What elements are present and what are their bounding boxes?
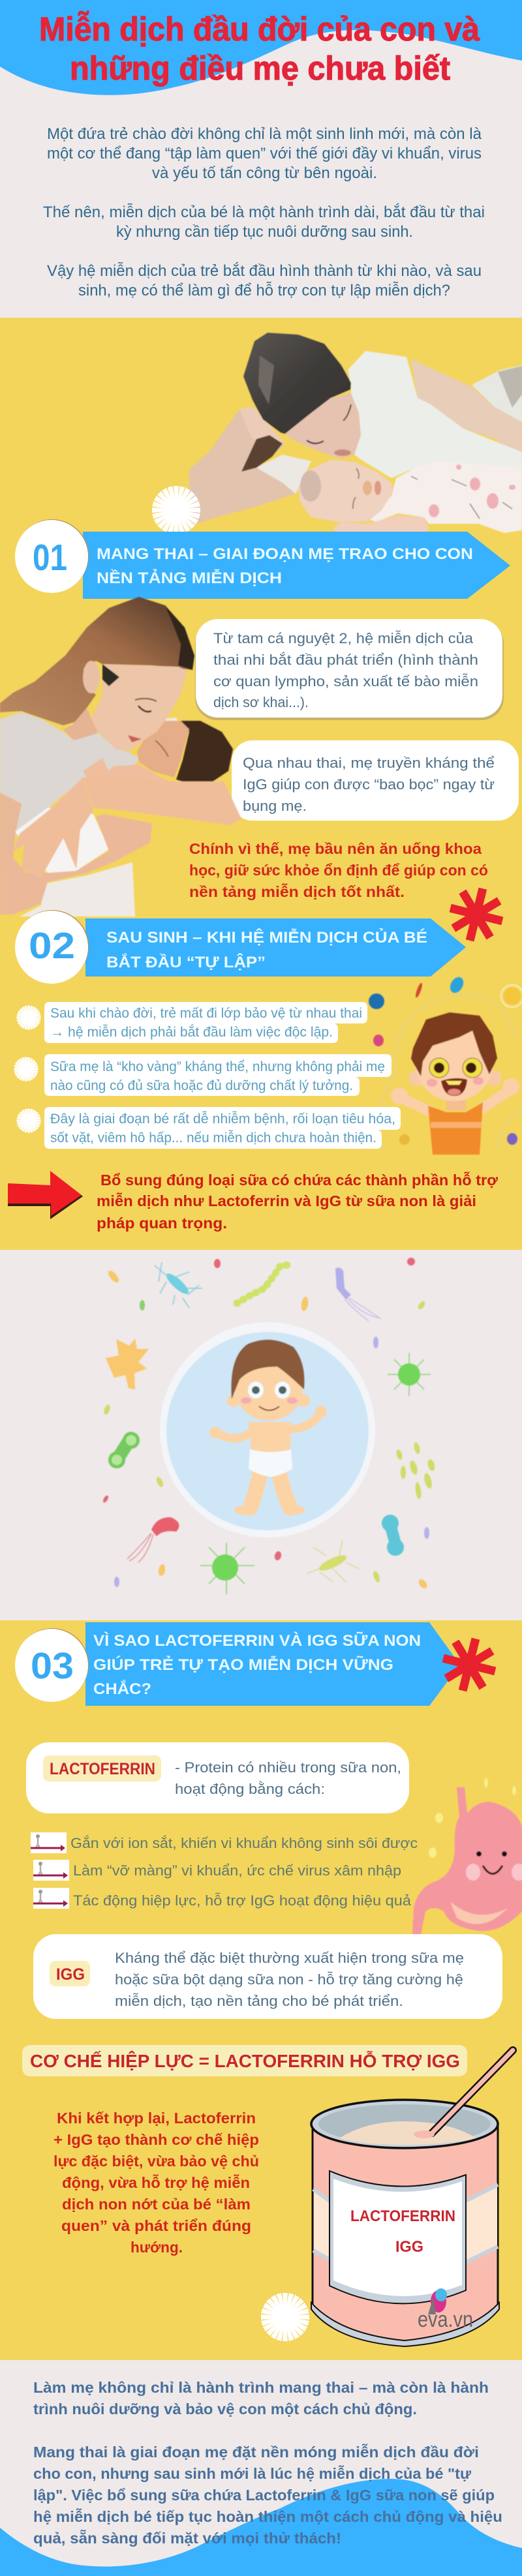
illustration: baby in immune bubble with germs <box>102 1258 436 1594</box>
conclusion text: quả, sẵn sàng đối mặt với mọi thử thách! <box>33 2529 341 2547</box>
germs <box>369 993 384 1009</box>
arms <box>399 1091 509 1112</box>
number: 01 <box>33 537 67 579</box>
number circle <box>16 519 89 592</box>
intro text: sinh, mẹ có thể làm gì để hỗ trợ con tự lập miễn dịch? <box>78 282 450 299</box>
purple bacterium <box>335 1267 381 1321</box>
red text: synergy: lực đặc biệt, vừa bảo vệ chủ <box>54 2153 259 2170</box>
red advice text 1: học, giữ sức khỏe ổn định để giúp con có <box>189 862 488 879</box>
smile <box>259 1406 279 1410</box>
green virus bottom <box>200 1543 254 1594</box>
speech box 1: cơ quan lympho, sản xuất tế bào miễn <box>213 673 478 689</box>
watermark: eva.vn <box>418 2288 473 2332</box>
panel: header <box>0 0 522 299</box>
eyes <box>429 1058 449 1078</box>
arm <box>83 776 241 825</box>
illustration: happy stomach <box>412 1778 522 1935</box>
lactoferrin label <box>43 1755 161 1781</box>
item 3: Tác động hiệp lực, hỗ trợ IgG hoạt động hiệu quả <box>73 1892 412 1909</box>
feet <box>234 1506 253 1515</box>
cheeks <box>241 1397 251 1404</box>
number circle <box>16 910 89 983</box>
baby face <box>137 721 189 778</box>
upper arm <box>0 793 22 869</box>
lower arm and baby legs <box>0 814 152 915</box>
panel: IgG: miễn dịch, tạo nền tảng cho bé phát triển. <box>115 1993 403 2009</box>
shirt <box>428 1102 483 1155</box>
bullet 3 <box>17 1107 401 1149</box>
bullet 2: nào cũng có đủ sữa hoặc đủ dưỡng chất lý tưởng. <box>50 1078 353 1093</box>
shirt <box>348 351 522 478</box>
speech box 2: bụng mẹ. <box>243 798 307 814</box>
panel: IgG: IGG <box>56 1965 85 1984</box>
baby arm <box>333 515 429 541</box>
face <box>285 393 361 459</box>
red text: synergy: dịch non nớt của bé “làm <box>62 2196 251 2213</box>
bottom blue wave <box>0 2479 522 2576</box>
hands <box>209 1427 221 1438</box>
bullet 3: Đây là giai đoạn bé rất dễ nhiễm bệnh, rối loạn tiêu hóa, <box>50 1112 395 1127</box>
face <box>415 1025 493 1101</box>
hand <box>13 778 93 877</box>
red advice text 1: Chính vì thế, mẹ bầu nên ăn uống khoa <box>189 840 482 857</box>
bullet 3: sốt vặt, viêm hô hấp... nếu miễn dịch chưa hoàn thiện. <box>50 1130 376 1145</box>
intro text: Vậy hệ miễn dịch của trẻ bắt đầu hình thành từ khi nào, và sau <box>47 262 482 280</box>
banner 03 <box>15 1622 460 1706</box>
protective bubble outline <box>378 995 522 1151</box>
speech box 2 <box>232 740 519 821</box>
baby legs <box>250 1474 290 1508</box>
cream band <box>314 2187 497 2262</box>
panel: lactoferrin: LACTOFERRIN <box>50 1760 155 1778</box>
speech box 2: IgG giúp con được “bao bọc” ngay từ <box>243 776 495 793</box>
stomach highlight <box>450 1902 508 1924</box>
conclusion text <box>33 2379 502 2547</box>
intro text <box>43 125 485 299</box>
photo: asian mother holding newborn <box>0 597 241 917</box>
yellow bacterium <box>307 1541 359 1582</box>
conclusion text: cho con, nhưng sau sinh mới là lúc hệ miễn dịch của bé "tự <box>33 2464 471 2482</box>
banner 03: GIÚP TRẺ TỰ TẠO MIỄN DỊCH VỮNG <box>93 1655 393 1674</box>
box text: Từ tam cá nguyệt 2, hệ miễn dịch của <box>213 630 474 646</box>
bubble <box>160 1322 375 1538</box>
intro text: Thế nên, miễn dịch của bé là một hành trình dài, bắt đầu từ thai <box>43 204 485 221</box>
hair <box>231 1340 305 1399</box>
hair <box>243 333 351 434</box>
cheeks <box>427 1079 437 1087</box>
teal double cell <box>382 1515 404 1556</box>
number: 03 <box>31 1645 74 1687</box>
speech box 1: thai nhi bắt đầu phát triển (hình thành <box>213 652 478 668</box>
heading: synergy <box>22 2045 467 2076</box>
banner 02: BẮT ĐẦU “TỰ LẬP” <box>106 953 266 971</box>
red text: synergy: động, vừa hỗ trợ hệ miễn <box>62 2174 250 2191</box>
red advice text 2: pháp quan trọng. <box>97 1215 227 1232</box>
bullet 2 <box>14 1054 392 1096</box>
conclusion text: Mang thai là giai đoạn mẹ đặt nền móng miễn dịch đầu đời <box>33 2443 479 2461</box>
banner 01 <box>15 519 510 599</box>
face <box>91 664 187 751</box>
red asterisk 1 <box>450 888 503 941</box>
box text: Qua nhau thai, mẹ truyền kháng thể <box>243 755 495 771</box>
eyes <box>248 1382 264 1399</box>
green double cell <box>108 1432 140 1468</box>
right arm <box>411 359 522 458</box>
panel: yellow background section 03 <box>0 1620 522 2360</box>
bullet 1: Sau khi chào đời, trẻ mất đi lớp bảo vệ từ nhau thai <box>50 1006 362 1021</box>
baby hair <box>176 721 233 784</box>
red text: synergy <box>54 2110 259 2256</box>
list: lactoferrin mechanisms <box>31 1832 418 1909</box>
description: - Protein có nhiều trong sữa non, <box>175 1759 401 1776</box>
orange amoeba <box>106 1339 149 1389</box>
wordmark: eva.vn <box>418 2307 473 2332</box>
baby body <box>370 461 522 533</box>
green chain <box>237 1265 290 1303</box>
red asterisk 2 <box>442 1638 496 1691</box>
sparkles <box>435 1813 443 1823</box>
red advice text 2: Bổ sung đúng loại sữa có chứa các thành phần hỗ trợ <box>100 1171 499 1189</box>
conclusion text: lập". Việc bổ sung sữa chứa Lactoferrin & IgG sữa non sẽ giúp <box>33 2487 495 2504</box>
panel: IgG <box>33 1934 502 2019</box>
hair <box>411 1012 497 1076</box>
band edges <box>313 2185 498 2262</box>
red text: synergy: hướng. <box>130 2239 183 2256</box>
red text: synergy: quen” và phát triển đúng <box>61 2217 251 2234</box>
mouth <box>441 1078 467 1096</box>
neck <box>63 708 98 740</box>
baby head <box>298 460 393 522</box>
heading: synergy: CƠ CHẾ HIỆP LỰC = LACTOFERRIN HỖ TRỢ IGG <box>30 2051 460 2071</box>
arrow banner <box>85 1622 460 1706</box>
banner 03: CHẮC? <box>93 1680 151 1698</box>
panel: yellow background sections 01 and 02 <box>0 318 522 1250</box>
red bacterium <box>127 1517 179 1562</box>
speech box 1 <box>195 619 504 720</box>
bullet 2: Sữa mẹ là “kho vàng” kháng thể, nhưng không phải mẹ <box>50 1059 385 1074</box>
panel: lactoferrin <box>26 1742 409 1813</box>
box <box>33 1934 502 2019</box>
diaper <box>249 1449 292 1477</box>
top blue wave <box>0 0 522 95</box>
IgG label <box>50 1961 90 1986</box>
starburst 1 <box>152 486 200 534</box>
bullet 1: → hệ miễn dịch phải bắt đầu làm việc độc lập. <box>50 1025 333 1040</box>
neck <box>446 1096 466 1110</box>
baby arms <box>219 1414 320 1438</box>
can body <box>313 2124 498 2343</box>
label text: LACTOFERRIN <box>350 2207 455 2225</box>
label <box>330 2171 466 2303</box>
number: 02 <box>29 925 75 967</box>
ponytail <box>241 435 283 472</box>
hair <box>0 597 194 725</box>
illustration: happy kid with germs <box>369 975 522 1155</box>
red advice text 1 <box>189 840 488 900</box>
banner 01: NỀN TẢNG MIỄN DỊCH <box>97 568 282 587</box>
bullet 1 <box>17 1002 367 1043</box>
item 1 <box>31 1832 418 1853</box>
conclusion text: Làm mẹ không chỉ là hành trình mang thai – mà còn là hành <box>33 2379 489 2396</box>
teal bacterium <box>155 1262 202 1308</box>
panel: conclusion <box>0 2379 522 2576</box>
conclusion text: trình nuôi dưỡng và bảo vệ con một cách chủ động. <box>33 2401 417 2417</box>
box <box>196 619 502 718</box>
baby shoulder <box>83 758 170 781</box>
photo: mother kissing sleeping baby <box>189 333 522 541</box>
item 2: Làm “vỡ màng” vi khuẩn, ức chế virus xâm nhập <box>73 1862 401 1879</box>
arrow: red pointing right <box>8 1171 83 1219</box>
intro text: Một đứa trẻ chào đời không chỉ là một sinh linh mới, mà còn là <box>47 125 482 143</box>
box <box>232 740 519 821</box>
title <box>39 10 480 87</box>
panel: IgG: hoặc sữa bột dạng sữa non - hỗ trợ tăng cường hệ <box>115 1971 463 1988</box>
red advice text 2 <box>97 1171 499 1232</box>
shirt <box>0 712 139 836</box>
forearm and hand <box>189 406 296 524</box>
green virus right <box>388 1353 431 1396</box>
item 1: Gắn với ion sắt, khiến vi khuẩn không sinh sôi được <box>70 1835 418 1851</box>
intro text: kỳ nhưng cần tiếp tục nuôi dưỡng sau sinh. <box>116 223 413 241</box>
red advice text 1: nền tảng miễn dịch tốt nhất. <box>189 883 405 900</box>
number circle <box>16 1628 89 1701</box>
box <box>26 1742 409 1813</box>
arrow banner <box>83 532 510 599</box>
torso <box>248 1422 291 1455</box>
germ ellipses <box>102 1258 436 1590</box>
blanket <box>15 808 109 873</box>
description: Kháng thể đặc biệt thường xuất hiện trong sữa mẹ <box>115 1950 464 1966</box>
item 3 <box>33 1888 412 1909</box>
starburst 2 <box>261 2293 309 2341</box>
red text: synergy: Khi kết hợp lại, Lactoferrin <box>57 2110 256 2127</box>
red text: synergy: + IgG tạo thành cơ chế hiệp <box>54 2131 259 2148</box>
back clothing <box>472 365 522 424</box>
illustration: milk can: IGG <box>395 2238 423 2256</box>
lower shirt <box>20 862 135 917</box>
heading: MANG THAI – GIAI ĐOẠN MẸ TRAO CHO CON <box>97 545 473 563</box>
spoon <box>432 2050 513 2133</box>
intro text: một cơ thể đang “tập làm quen” với thế giới đầy vi khuẩn, virus <box>47 145 482 162</box>
rim <box>311 2100 498 2148</box>
bottom rim <box>311 2303 499 2346</box>
arrow banner <box>85 918 466 977</box>
title: Miễn dịch đầu đời của con và <box>39 10 480 48</box>
illustration: milk can <box>311 2050 513 2346</box>
intro text: và yếu tố tấn công từ bên ngoài. <box>152 164 377 182</box>
panel: lactoferrin: hoạt động bằng cách: <box>175 1781 325 1797</box>
head <box>235 1356 303 1421</box>
heading: SAU SINH – KHI HỆ MIỄN DỊCH CỦA BÉ <box>106 928 427 947</box>
red advice text 2: miễn dịch như Lactoferrin và IgG từ sữa non là giải <box>97 1192 476 1209</box>
item 2 <box>33 1860 401 1881</box>
conclusion text: hệ miễn dịch bé tiếp tục hoàn thiện một cách chủ động và hiệu <box>33 2508 502 2525</box>
banner 02 <box>15 910 466 984</box>
title: những điều mẹ chưa biết <box>70 50 450 87</box>
logo icon <box>431 2290 446 2312</box>
heading: VÌ SAO LACTOFERRIN VÀ IGG SỮA NON <box>93 1631 421 1650</box>
ears <box>408 1070 424 1086</box>
stomach face <box>476 1851 482 1856</box>
speech box 1: dịch sơ khai...). <box>213 694 309 710</box>
box shadow <box>195 622 504 720</box>
bullet list <box>14 1002 401 1149</box>
